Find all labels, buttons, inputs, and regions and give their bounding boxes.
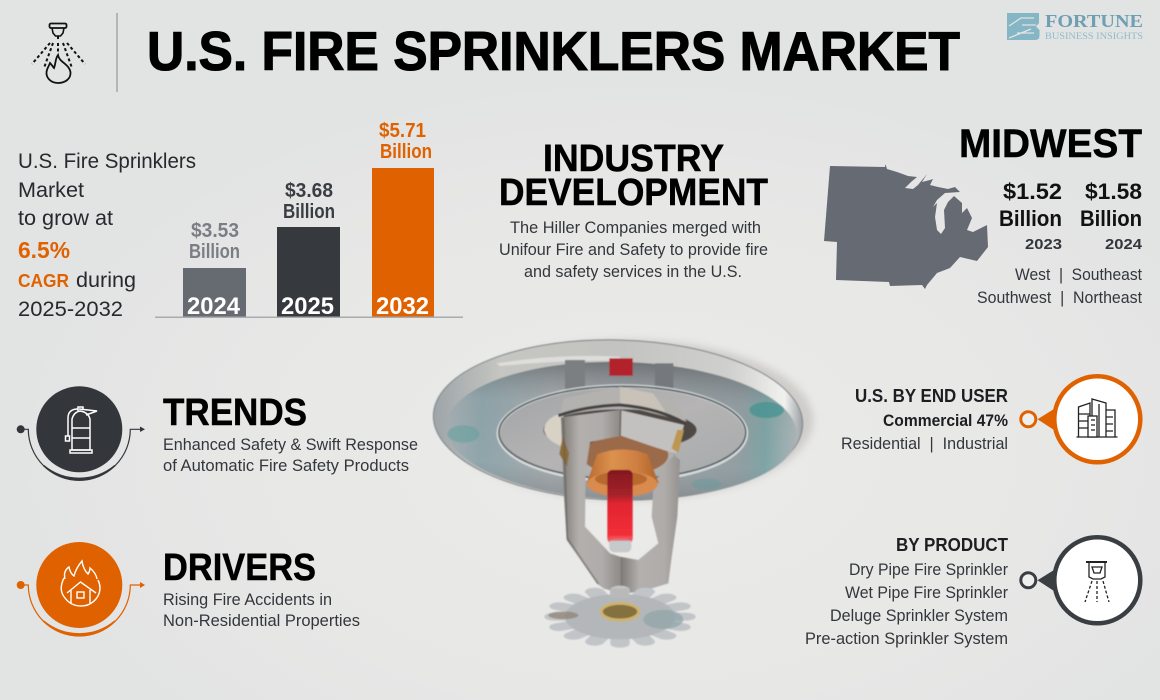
bar chart: 2024 — [187, 293, 241, 320]
icon: ceiling sprinkler — [1085, 562, 1109, 602]
cover plate — [431, 335, 805, 505]
midwest values: Billion — [999, 206, 1062, 231]
growth text block: to grow at — [18, 206, 113, 230]
trends text — [163, 436, 418, 475]
midwest other regions — [977, 266, 1142, 307]
drivers text — [163, 591, 360, 630]
midwest heading: MIDWEST — [959, 122, 1142, 166]
trends text: of Automatic Fire Safety Products — [163, 457, 409, 475]
midwest other regions: West | Southeast — [1015, 266, 1142, 284]
bar chart: Billion — [380, 141, 432, 163]
by product text block — [805, 535, 1008, 648]
title: U.S. FIRE SPRINKLERS MARKET — [147, 20, 960, 82]
right arm — [620, 410, 684, 593]
drivers icon badge — [17, 542, 145, 636]
trends icon badge — [17, 386, 145, 480]
midwest values — [999, 179, 1143, 253]
industry development heading: INDUSTRY — [543, 138, 724, 180]
drivers heading: DRIVERS — [163, 547, 316, 589]
header divider — [116, 13, 118, 92]
arch underside — [582, 436, 668, 474]
by product text block: Dry Pipe Fire Sprinkler — [849, 561, 1008, 579]
header icon: sprinkler over flame — [32, 24, 85, 83]
end user badge — [1021, 376, 1140, 462]
by product text block: Wet Pipe Fire Sprinkler — [845, 584, 1008, 602]
trends heading: TRENDS — [163, 392, 307, 434]
bar chart: 2032 — [376, 293, 429, 320]
deflector — [548, 590, 686, 644]
industry development text — [499, 219, 768, 281]
bar chart: 2025 — [281, 293, 334, 320]
bar chart: Billion — [189, 241, 240, 263]
by product badge — [1021, 537, 1140, 623]
bar chart — [155, 120, 463, 320]
icon: office buildings — [1076, 399, 1118, 437]
growth text block: U.S. Fire Sprinklers — [18, 149, 196, 173]
growth text block: 6.5% — [18, 237, 70, 263]
frame collar — [560, 387, 687, 422]
midwest values: $1.52 — [1003, 179, 1062, 204]
midwest values: 2024 — [1105, 236, 1143, 253]
end user text block: U.S. BY END USER — [855, 386, 1008, 406]
end user text block: Commercial 47% — [883, 412, 1008, 430]
by product text block: Deluge Sprinkler System — [830, 607, 1008, 625]
industry development text: Unifour Fire and Safety to provide fire — [499, 241, 768, 259]
bar chart: $5.71 — [379, 120, 426, 142]
growth text block: Market — [18, 178, 84, 202]
midwest map — [824, 164, 988, 289]
drivers text: Non-Residential Properties — [163, 612, 360, 630]
industry development text: The Hiller Companies merged with — [510, 219, 761, 237]
by product text block: Pre-action Sprinkler System — [805, 630, 1008, 648]
bar chart: Billion — [283, 201, 335, 223]
growth text block: 2025-2032 — [18, 297, 123, 321]
midwest values: Billion — [1080, 206, 1142, 231]
logo: Fortune Business Insights — [1007, 11, 1143, 42]
inner ring — [498, 386, 746, 481]
frame body — [561, 410, 620, 463]
midwest values: 2023 — [1025, 236, 1062, 253]
end user text block: Residential | Industrial — [841, 435, 1008, 453]
end user text block — [841, 386, 1008, 453]
growth text block: CAGR — [18, 271, 69, 291]
logo: Fortune Business Insights: FORTUNE — [1045, 11, 1143, 31]
photo: ceiling fire sprinkler — [431, 335, 813, 644]
midwest values: $1.58 — [1085, 179, 1142, 204]
icon: fire extinguisher — [66, 407, 97, 453]
bar chart: $3.53 — [191, 220, 239, 242]
by product text block: BY PRODUCT — [896, 535, 1008, 555]
industry development heading — [499, 138, 768, 214]
industry development text: and safety services in the U.S. — [524, 263, 742, 281]
left arm — [561, 410, 620, 593]
logo: Fortune Business Insights: BUSINESS INSIGHTS — [1045, 32, 1143, 42]
drivers text: Rising Fire Accidents in — [163, 591, 332, 609]
trends text: Enhanced Safety & Swift Response — [163, 436, 418, 454]
industry development heading: DEVELOPMENT — [499, 172, 768, 214]
icon: house on fire — [61, 561, 100, 606]
growth text block — [18, 149, 196, 321]
bar chart: $3.68 — [285, 180, 333, 202]
growth text block: during — [76, 268, 136, 292]
midwest other regions: Southwest | Northeast — [977, 289, 1142, 307]
glass bulb — [607, 470, 633, 543]
copper cap — [587, 449, 659, 495]
